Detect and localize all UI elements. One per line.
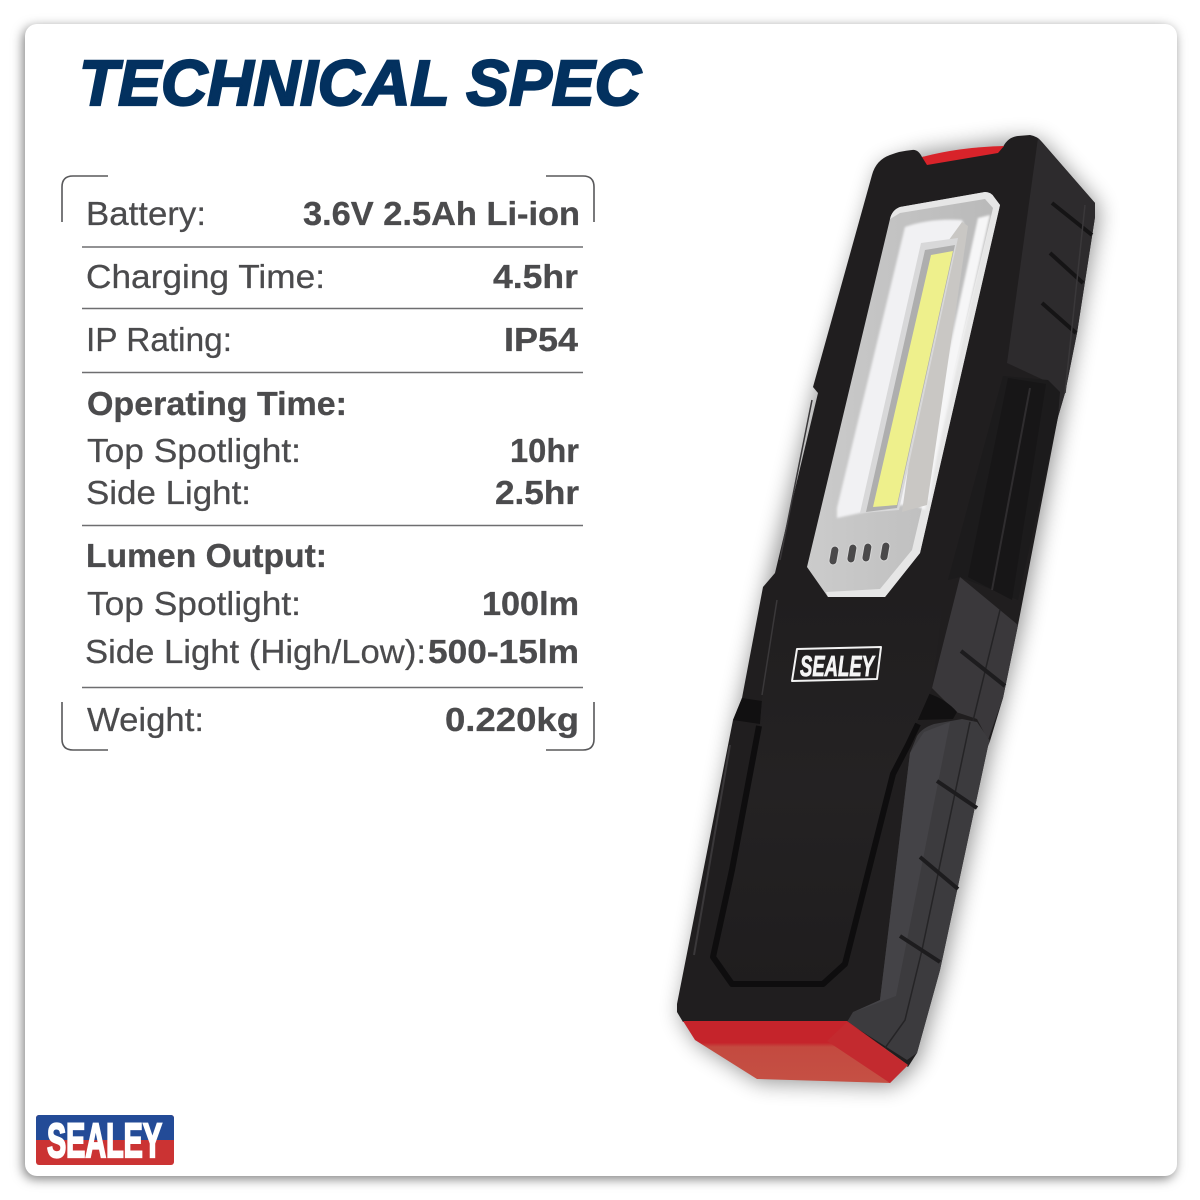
row: lumen top spotlight — [87, 585, 579, 622]
row: operating top spotlight: Top Spotlight: — [87, 432, 301, 469]
red bottom cap — [683, 1021, 908, 1083]
logo: Sealey brand: SEALEY — [47, 1115, 162, 1168]
row: operating top spotlight: 10hr — [510, 432, 579, 469]
body silhouette — [677, 135, 1095, 1067]
row: lumen side light: Side Light (High/Low): — [85, 633, 426, 670]
row: IP rating: IP54 — [504, 321, 579, 358]
row: operating side light: 2.5hr — [495, 474, 579, 511]
row: weight: Weight: — [87, 701, 204, 738]
row: battery: Battery: — [86, 195, 206, 232]
row: operating top spotlight — [87, 432, 579, 469]
product badge — [792, 647, 881, 683]
dark notches at hinge — [907, 693, 957, 720]
row: IP rating — [86, 321, 579, 358]
logo: Sealey brand — [36, 1115, 174, 1168]
row: operating side light: Side Light: — [86, 474, 251, 511]
row: weight: 0.220kg — [445, 701, 579, 738]
row: lumen top spotlight: 100lm — [482, 585, 579, 622]
row: weight — [87, 701, 579, 738]
row: lumen side light — [85, 633, 579, 670]
silver light plate — [807, 192, 1000, 597]
row: battery: 3.6V 2.5Ah Li-ion — [303, 195, 580, 232]
row: charging time: 4.5hr — [493, 258, 578, 295]
panel: specification table — [62, 176, 594, 750]
title: TECHNICAL SPEC — [79, 47, 642, 119]
table frame brackets — [62, 176, 594, 750]
row: lumen top spotlight: Top Spotlight: — [87, 585, 301, 622]
LED strip — [873, 251, 953, 507]
lower side pod — [847, 719, 990, 1060]
middle side channel — [948, 376, 1060, 600]
heading: operating time: Operating Time: — [87, 385, 347, 422]
icon: work light product illustration — [677, 135, 1098, 1086]
top side wall — [1007, 138, 1095, 417]
heading: lumen output: Lumen Output: — [86, 537, 327, 574]
face panel and recess — [713, 590, 945, 984]
row: charging time: Charging Time: — [86, 258, 325, 295]
product badge: SEALEY — [800, 651, 876, 683]
reflector — [837, 220, 965, 518]
red top cap — [922, 146, 1004, 165]
indicator lights — [828, 541, 891, 566]
upper side pod — [932, 577, 1018, 740]
row: IP rating: IP Rating: — [86, 321, 232, 358]
row: lumen side light: 500-15lm — [428, 633, 579, 670]
row: battery — [86, 195, 580, 232]
row: charging time — [86, 258, 578, 295]
row: operating side light — [86, 474, 579, 511]
